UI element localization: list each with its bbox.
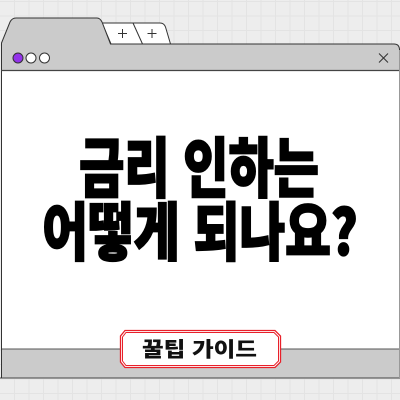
badge [120,330,280,368]
icon: close [379,54,388,62]
title bar [2,18,400,71]
title line 2: 어떻게 되나요? [42,183,358,274]
title line 1: 금리 인하는 [79,116,319,211]
badge label: 꿀팁 가이드 [142,333,257,363]
inactive tabs [102,23,170,44]
title [42,116,358,274]
icon: plus [118,29,127,38]
icon: white dot [26,53,36,63]
icon: white dot second [40,53,50,63]
bottom bar [1,349,399,378]
window body [1,70,399,349]
icon: purple dot [13,53,23,63]
icon: plus second [148,29,156,38]
